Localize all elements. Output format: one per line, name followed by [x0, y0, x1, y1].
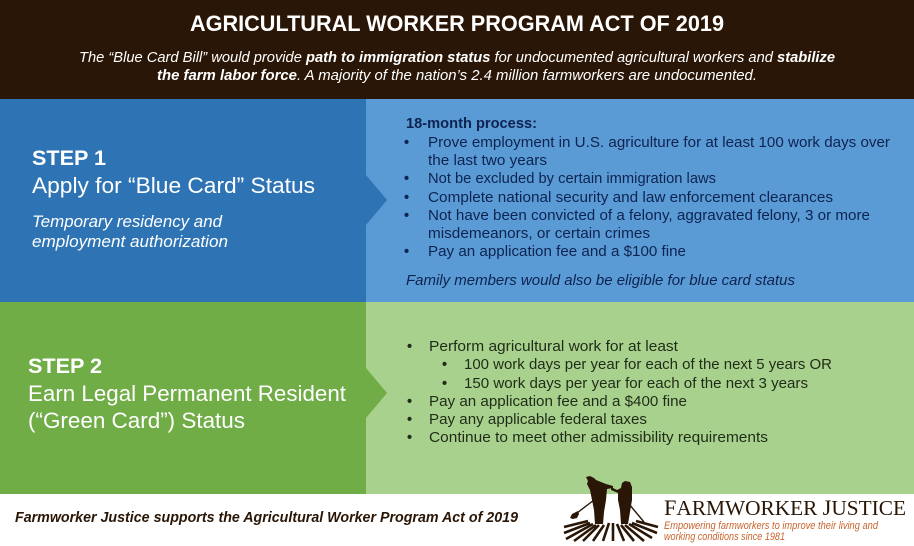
step 1 requirements list: Pay an application fee and a $100 fine	[428, 244, 686, 260]
step 1 requirements list: Family members would also be eligible for blue card status	[406, 273, 795, 289]
step 1 left chevron panel	[0, 99, 387, 302]
step 1 requirements list: the last two years	[428, 153, 547, 169]
shovel	[570, 500, 594, 519]
logo wordmark: FARMWORKER JUSTICE	[664, 495, 906, 520]
step 2 requirements list: •	[407, 412, 412, 428]
worker with hoe	[611, 481, 632, 524]
step 1 requirements list: •	[404, 208, 409, 224]
step 2 requirements list: Continue to meet other admissibility requirements	[429, 430, 768, 446]
panel: step 1	[0, 99, 914, 302]
step 2 left chevron panel	[0, 302, 387, 494]
step 1 description	[32, 213, 228, 251]
title: AGRICULTURAL WORKER PROGRAM ACT OF 2019	[190, 11, 724, 36]
subtitle	[79, 50, 835, 84]
step 2 requirements list: •	[442, 357, 447, 373]
step 1 description: Temporary residency and	[32, 213, 223, 231]
step 1 requirements list: •	[404, 244, 409, 260]
step 2 requirements list: Pay any applicable federal taxes	[429, 412, 647, 428]
step 2 requirements list: •	[407, 394, 412, 410]
step 1 requirements list: Not have been convicted of a felony, aggravated felony, 3 or more	[428, 208, 870, 224]
step 2 heading: STEP 2	[28, 355, 102, 378]
step 2 requirements list: 100 work days per year for each of the next 5 years OR	[464, 357, 832, 373]
step 1 requirements list: •	[404, 135, 409, 151]
step 2 requirements list: •	[407, 339, 412, 355]
step 1 requirements list: •	[404, 190, 409, 206]
step 1 requirements list: misdemeanors, or certain crimes	[428, 226, 650, 242]
logo tagline: working conditions since 1981	[664, 531, 785, 543]
furrows	[564, 521, 658, 541]
step 1 requirements list	[404, 116, 890, 289]
step 2 heading	[28, 355, 346, 433]
step 2 requirements list: Pay an application fee and a $400 fine	[429, 394, 687, 410]
step 1 requirements list: Not be excluded by certain immigration laws	[428, 171, 716, 187]
step 2 heading: (“Green Card”) Status	[28, 408, 245, 433]
step 1 heading: Apply for “Blue Card” Status	[32, 173, 315, 198]
step 1 heading: STEP 1	[32, 147, 106, 170]
step 2 requirements list	[407, 339, 832, 446]
step 2 requirements list: 150 work days per year for each of the next 3 years	[464, 376, 808, 392]
worker with shovel	[586, 476, 613, 524]
logo tagline	[664, 520, 879, 543]
subtitle: the farm labor force . A majority of the nation’s 2.4 million farmworkers are undocumented.	[157, 68, 757, 84]
logo tagline: Empowering farmworkers to improve their living and	[664, 520, 879, 532]
step 1 heading	[32, 147, 315, 198]
step 2 requirements list: •	[407, 430, 412, 446]
step 1 requirements list: •	[404, 171, 409, 187]
footer statement: Farmworker Justice supports the Agricultural Worker Program Act of 2019	[15, 510, 518, 526]
step 2 requirements list: Perform agricultural work for at least	[429, 339, 678, 355]
subtitle: The “Blue Card Bill” would provide path to immigration status for undocumented agricultural workers and stabilize	[79, 50, 835, 66]
panel: step 2	[0, 302, 914, 494]
step 1 requirements list: Prove employment in U.S. agriculture for at least 100 work days over	[428, 135, 890, 151]
icon: farmworker justice logo	[564, 476, 658, 541]
header band	[0, 0, 914, 99]
step 1 description: employment authorization	[32, 233, 228, 251]
step 1 requirements list: 18-month process:	[406, 116, 537, 132]
step 2 requirements list: •	[442, 376, 447, 392]
step 2 heading: Earn Legal Permanent Resident	[28, 381, 346, 406]
step 1 requirements list: Complete national security and law enforcement clearances	[428, 190, 833, 206]
hoe	[629, 504, 644, 522]
